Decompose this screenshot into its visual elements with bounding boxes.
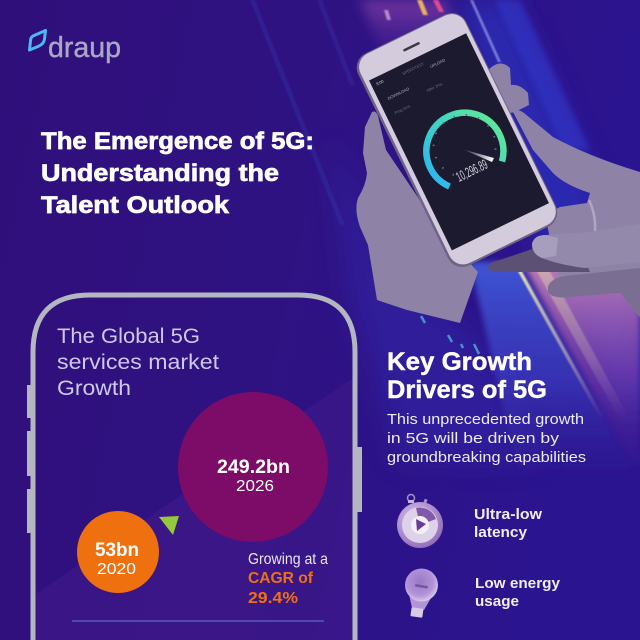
- circle: 2026 value: 249.2bn: [217, 457, 290, 478]
- side buttons: [27, 385, 362, 533]
- icon: stopwatch: [397, 494, 443, 548]
- market heading: [57, 325, 219, 400]
- key growth drivers heading: Key Growth: [387, 348, 532, 376]
- circle: 2026 value: [178, 392, 328, 542]
- icon: light bulb: [405, 568, 438, 618]
- lower finger: [548, 268, 640, 317]
- speed gauge: [426, 113, 503, 186]
- phone body: [351, 8, 563, 272]
- hands in front of phone: [488, 200, 640, 317]
- phone: speed test: Jitter 2ms: [425, 81, 443, 93]
- market panel: phone frame: [27, 295, 362, 640]
- phone: speed test: 9:00: [375, 78, 385, 86]
- driver label: ultra-low latency: Ultra-low: [474, 506, 542, 523]
- hands behind phone: [356, 63, 640, 323]
- CAGR callout: CAGR of: [248, 570, 314, 587]
- circle: 2020 value: [77, 511, 159, 593]
- key growth drivers heading: [387, 348, 547, 404]
- thumb nail: [532, 235, 558, 258]
- icon: compass leaf: [30, 30, 46, 50]
- phone: speed test: UPLOAD: [429, 57, 446, 69]
- title: The Emergence of 5G:: [41, 128, 314, 155]
- driver label: ultra-low latency: latency: [474, 524, 528, 541]
- market heading: Growth: [57, 377, 131, 400]
- arrow: [159, 516, 179, 535]
- logo: draup: draup: [48, 32, 121, 64]
- phone screen: [369, 33, 549, 250]
- speed value: 10,296.89: [453, 156, 490, 185]
- driver label: low energy usage: Low energy: [475, 575, 561, 592]
- driver label: low energy usage: [475, 575, 561, 610]
- earpiece: [403, 42, 420, 52]
- circle: 2020 value: 53bn: [95, 540, 139, 561]
- left hand: [356, 112, 478, 323]
- drivers description: This unprecedented growth: [387, 411, 584, 428]
- key growth drivers heading: Drivers of 5G: [387, 376, 547, 404]
- needle: [462, 149, 494, 162]
- phone: speed test: Ping 4ms: [394, 103, 411, 115]
- title: Talent Outlook: [41, 192, 230, 219]
- CAGR callout: [248, 551, 328, 607]
- phone: speed test: [351, 8, 563, 272]
- cyan dashes: [421, 316, 479, 354]
- drivers description: in 5G will be driven by: [387, 430, 560, 447]
- phone outline: [33, 295, 355, 640]
- circle: 2026 value: 2026: [236, 478, 274, 495]
- CAGR callout: Growing at a: [248, 551, 328, 568]
- index finger: [513, 110, 640, 215]
- market heading: services market: [57, 351, 219, 374]
- upper finger: [488, 63, 529, 115]
- streaks below phone: [470, 262, 640, 480]
- phone: speed test: DOWNLOAD: [387, 86, 410, 101]
- ring: [589, 200, 595, 231]
- diagonal light band: [36, 378, 353, 640]
- CAGR callout: 29.4%: [248, 590, 298, 607]
- driver label: low energy usage: usage: [475, 593, 519, 610]
- market heading: The Global 5G: [57, 325, 200, 348]
- driver label: ultra-low latency: [474, 506, 542, 541]
- title: [41, 128, 314, 219]
- title: Understanding the: [41, 160, 279, 187]
- gauge ticks: [434, 115, 496, 175]
- circle: 2020 value: 2020: [97, 561, 136, 578]
- lower dark finger: [488, 248, 590, 272]
- phone: speed test: SPEEDTEST: [401, 61, 425, 76]
- blue glow right of phone: [455, 0, 640, 420]
- drivers description: [387, 411, 586, 466]
- drivers description: groundbreaking capabilities: [387, 449, 586, 466]
- thumb: [532, 224, 640, 268]
- palm: [545, 172, 640, 317]
